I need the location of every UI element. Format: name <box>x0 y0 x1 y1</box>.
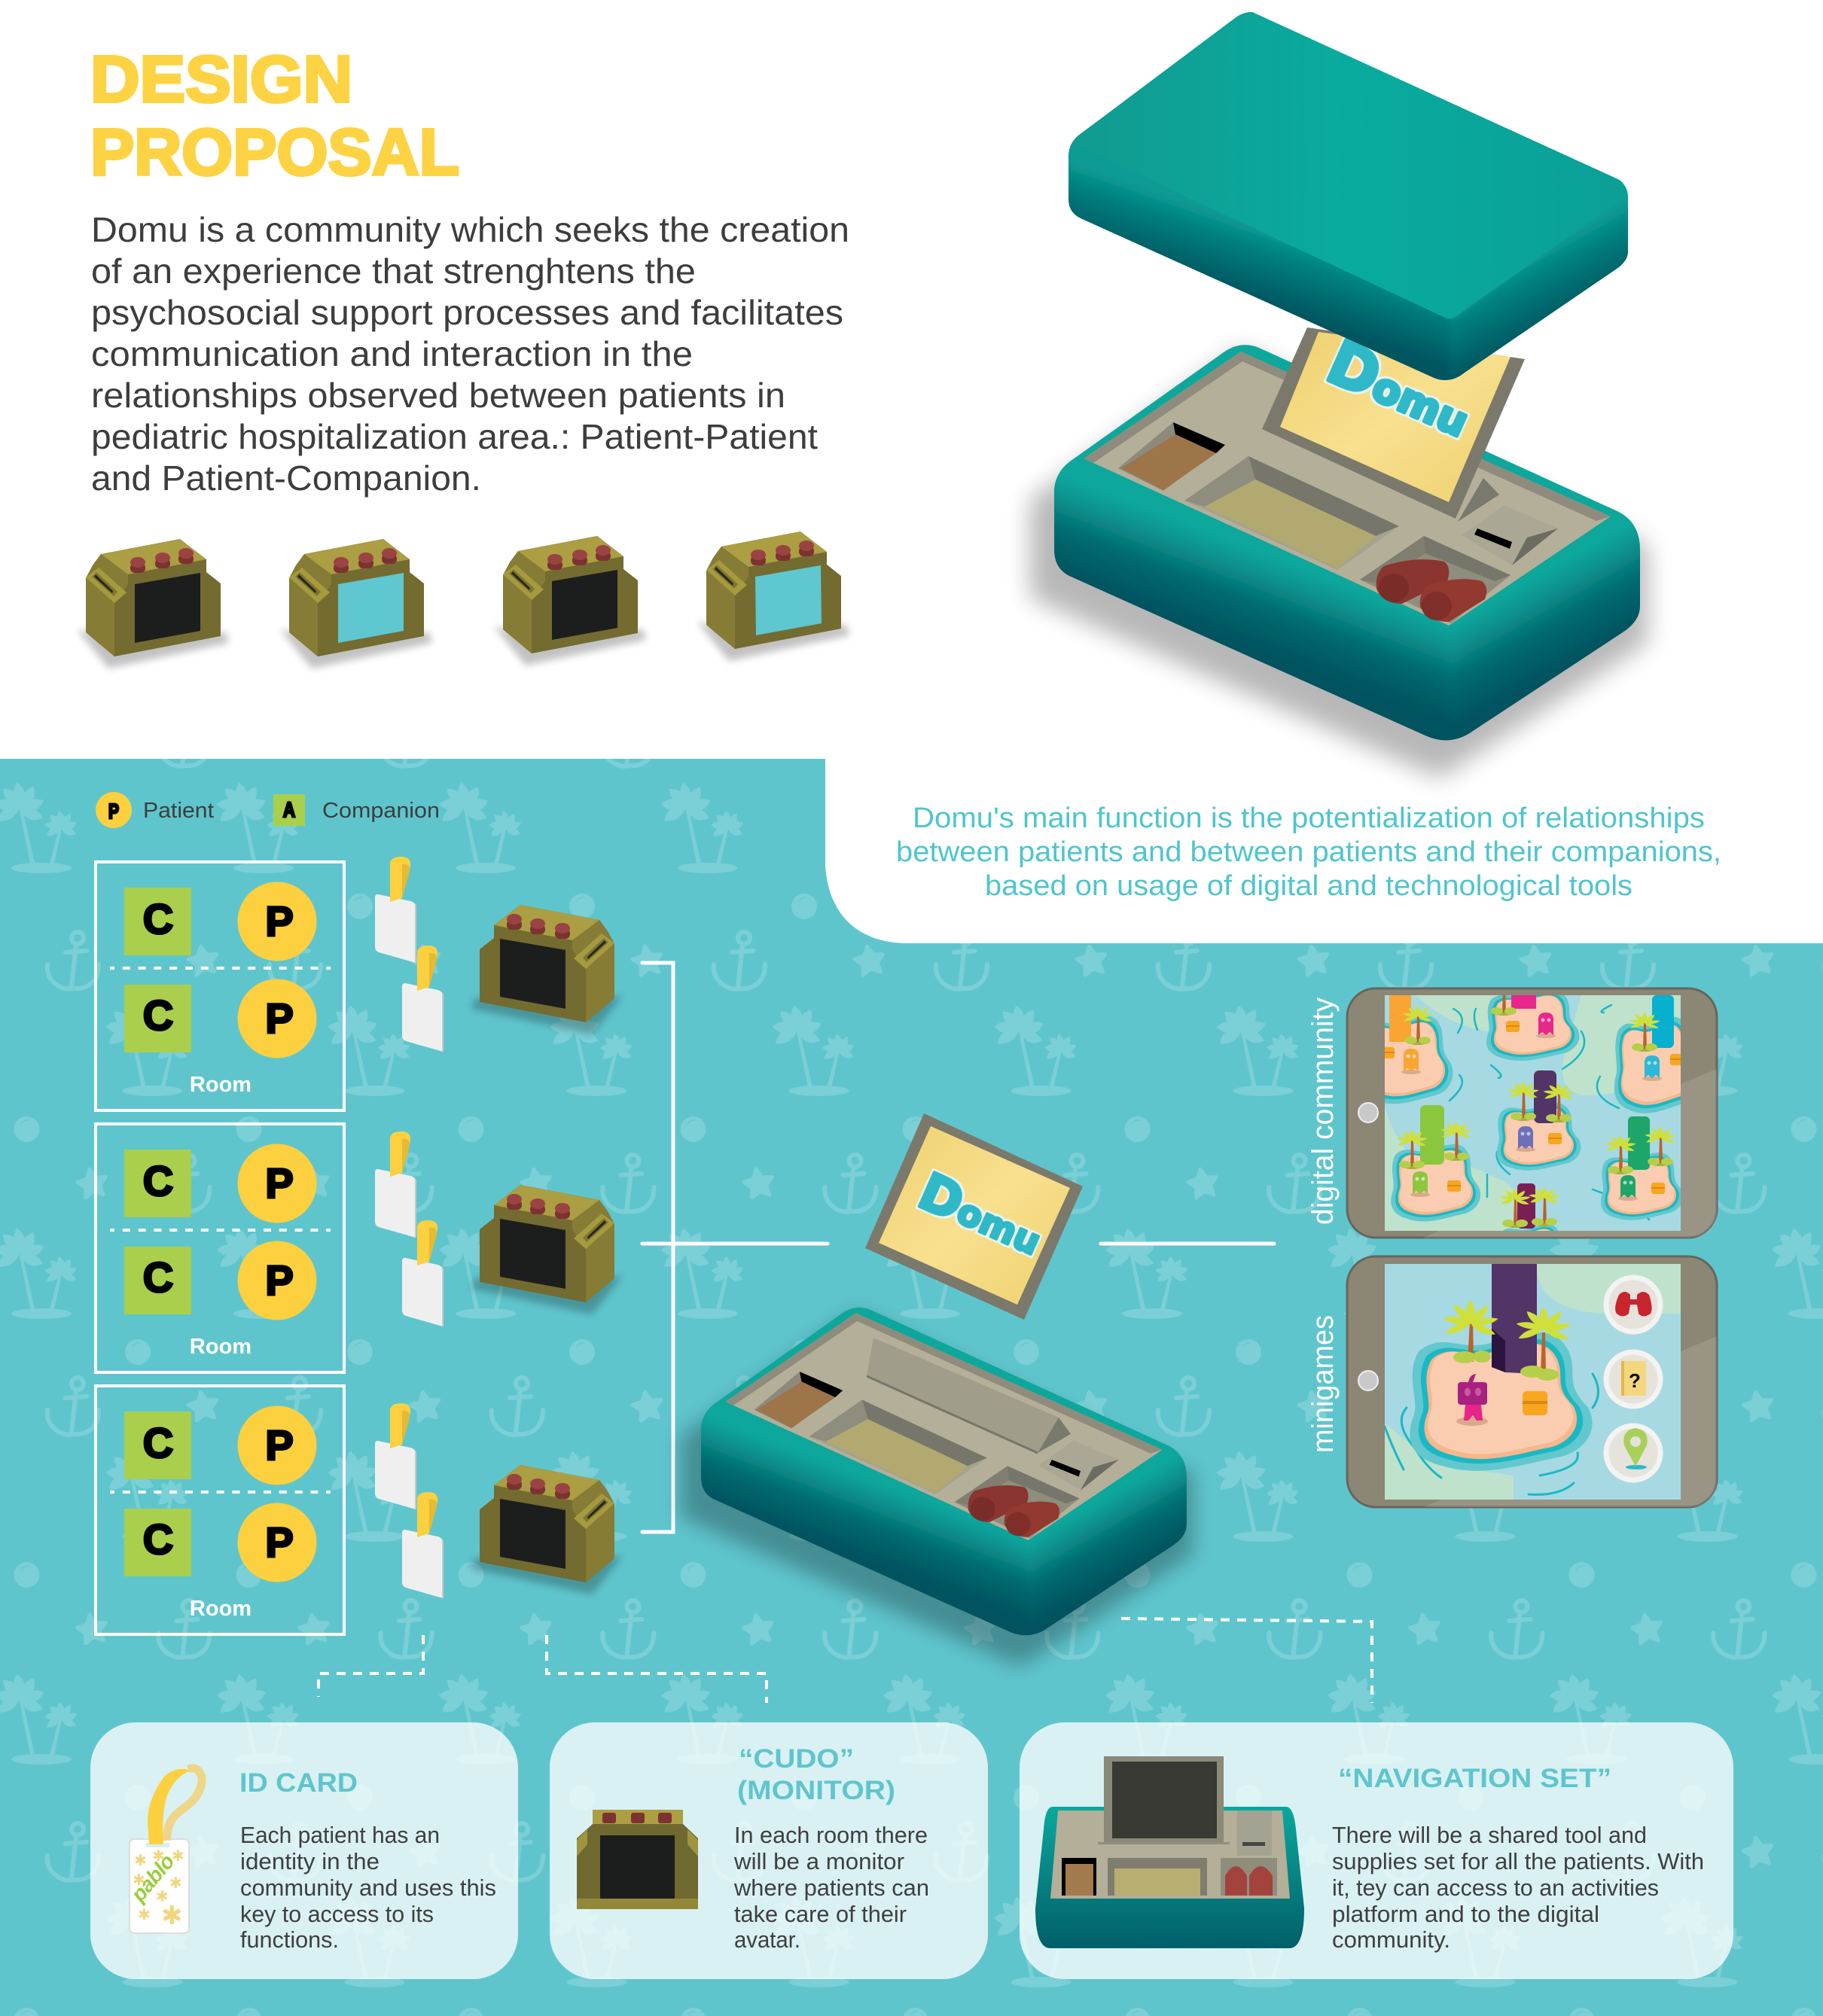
card: id card: ID CARD <box>239 1768 358 1798</box>
legend patient <box>96 792 214 828</box>
card: cudo monitor <box>550 1722 988 1979</box>
legend <box>96 792 440 828</box>
fold-out screen <box>1262 327 1525 522</box>
id tag illustration: ✱ <box>172 1848 184 1865</box>
id tag illustration: ✱ <box>134 1853 147 1869</box>
teal pattern panel <box>0 759 1823 2016</box>
folded screen ridge <box>867 1338 1071 1453</box>
box top view <box>1035 1756 1304 1948</box>
room monitors <box>471 905 623 1594</box>
card: cudo monitor: In each room there <box>734 1822 928 1848</box>
book button <box>1606 1352 1660 1406</box>
room 3: C <box>143 1515 173 1563</box>
room 2: C <box>143 1157 173 1204</box>
room 1: C <box>143 991 173 1039</box>
card: cudo monitor: avatar. <box>734 1926 800 1953</box>
intro paragraph <box>91 210 849 498</box>
intro paragraph: psychosocial support processes and facilitates <box>91 293 843 332</box>
legend patient: P <box>108 799 119 823</box>
callout: main function: based on usage of digital and technological tools <box>985 870 1632 902</box>
box tray <box>1030 324 1664 778</box>
id tag illustration: ✱ <box>138 1907 151 1923</box>
label digital community: digital community <box>1306 997 1340 1225</box>
monitor front view <box>577 1810 698 1909</box>
book button: ? <box>1629 1369 1641 1392</box>
card: id card: key to access to its <box>240 1901 434 1927</box>
room 3: P <box>265 1421 294 1469</box>
intro paragraph: communication and interaction in the <box>91 334 693 373</box>
dashed connectors <box>319 1619 1372 1703</box>
room 2: P <box>265 1256 294 1304</box>
intro paragraph: and Patient-Companion. <box>91 458 481 498</box>
intro paragraph: of an experience that strenghtens the <box>91 251 696 291</box>
card: navigation set <box>1020 1722 1733 1979</box>
card: id card: Each patient has an <box>240 1822 440 1848</box>
title: PROPOSAL <box>90 116 459 189</box>
room 1: P <box>265 897 294 945</box>
intro paragraph: relationships observed between patients in <box>91 376 785 415</box>
card: id card: identity in the <box>240 1848 380 1874</box>
id tags group <box>375 857 443 1598</box>
card: navigation set: platform and to the digital <box>1332 1901 1599 1927</box>
monitor teal <box>280 539 432 668</box>
room 3: P <box>265 1518 294 1566</box>
name: pablo <box>126 1850 179 1907</box>
floating screen <box>865 1113 1083 1320</box>
card: cudo monitor: (MONITOR) <box>737 1776 895 1805</box>
logo center: D <box>910 1162 973 1233</box>
monitor teal 2 <box>697 531 849 661</box>
intro paragraph: Domu is a community which seeks the creation <box>91 210 849 249</box>
card: cudo monitor: where patients can <box>733 1874 929 1901</box>
callout: main function: between patients and between patients and their companions, <box>896 836 1721 868</box>
tablet: digital community <box>1346 988 1718 1239</box>
callout: main function <box>896 802 1721 902</box>
id tag illustration: ✱ <box>133 1872 145 1889</box>
id tag illustration: ✱ <box>169 1875 182 1892</box>
room 2: P <box>265 1159 294 1207</box>
logo: omu <box>1365 363 1475 446</box>
id tag illustration: ✱ <box>161 1902 182 1930</box>
room 1: C <box>143 895 173 943</box>
card: navigation set: supplies set for all the patients. With <box>1332 1848 1704 1874</box>
navigation box center <box>681 1113 1206 1667</box>
legend companion <box>273 794 440 826</box>
legend patient: Patient <box>143 799 214 823</box>
room 1 <box>96 862 344 1110</box>
intro paragraph: pediatric hospitalization area.: Patient-Patient <box>91 417 818 456</box>
lid <box>1068 12 1628 380</box>
room 2 <box>96 1124 344 1372</box>
card: navigation set: it, tey can access to an activities <box>1332 1874 1659 1901</box>
logo: D <box>1317 327 1392 411</box>
card: id card: community and uses this <box>240 1874 496 1901</box>
logo center: omu <box>951 1191 1047 1264</box>
card: navigation set: community. <box>1332 1926 1450 1953</box>
tablet: minigames <box>1347 1256 1717 1507</box>
legend companion: A <box>283 798 295 821</box>
callout: main function: Domu's main function is the potentialization of relationships <box>913 802 1705 834</box>
card: navigation set: “NAVIGATION SET” <box>1338 1764 1611 1793</box>
legend companion: Companion <box>322 799 440 823</box>
card: id card <box>90 1722 518 1979</box>
binoculars button <box>1606 1278 1660 1332</box>
card: navigation set: There will be a shared tool and <box>1332 1822 1647 1848</box>
id tag illustration: ✱ <box>156 1889 169 1905</box>
card: id card: functions. <box>240 1926 339 1953</box>
title: DESIGN <box>90 43 352 116</box>
bracket connectors <box>642 963 1274 1532</box>
open navigation box with lid <box>1030 8 1664 778</box>
room 1: P <box>265 994 294 1042</box>
room 2: Room <box>190 1335 252 1359</box>
row of four monitors <box>77 531 849 668</box>
card: cudo monitor: will be a monitor <box>733 1848 904 1874</box>
room 3: C <box>143 1419 173 1466</box>
card: cudo monitor: “CUDO” <box>739 1744 854 1774</box>
room 1: Room <box>190 1073 252 1097</box>
id tag illustration: ✱ <box>152 1848 165 1865</box>
pin button <box>1606 1426 1660 1480</box>
monitor black <box>77 539 229 668</box>
monitor black 2 <box>494 536 646 665</box>
card: cudo monitor: take care of their <box>734 1901 907 1927</box>
id tag illustration <box>126 1768 202 1933</box>
label minigames: minigames <box>1306 1315 1340 1453</box>
center tray <box>681 1290 1206 1667</box>
room 3 <box>96 1386 344 1634</box>
title <box>90 43 459 189</box>
room 2: C <box>143 1253 173 1301</box>
room 3: Room <box>190 1597 252 1621</box>
